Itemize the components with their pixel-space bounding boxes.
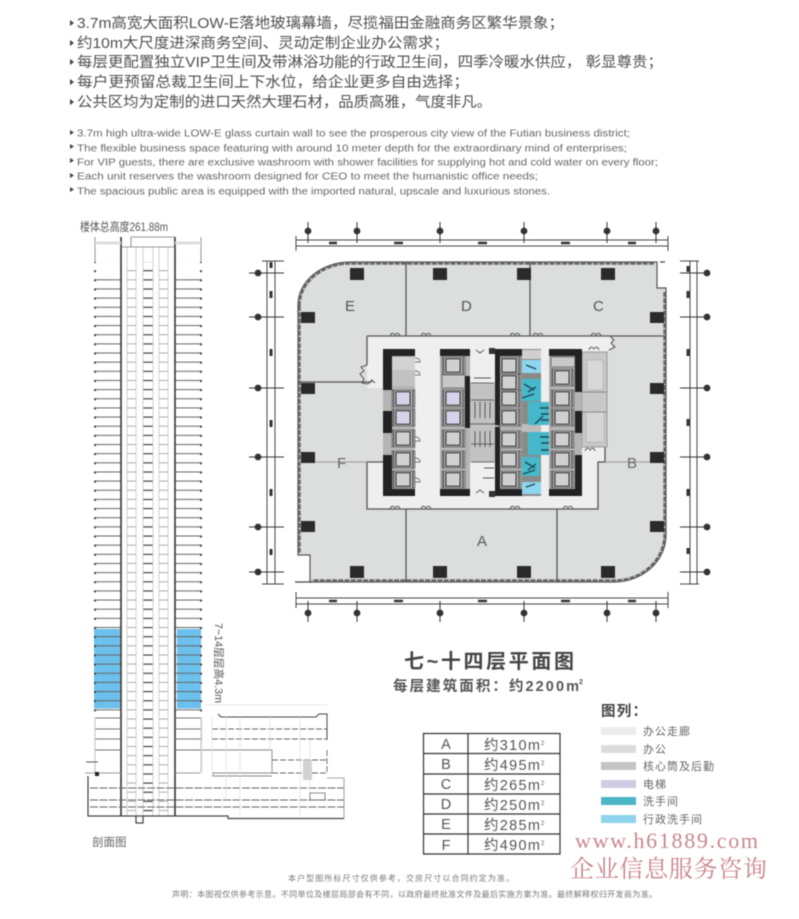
text block: Chinese features: 公共区均为定制的进口天然大理石材，品质高雅，气度非凡。 [77, 94, 492, 111]
unit labels: E [345, 298, 355, 315]
table: unit areas: F [442, 838, 451, 854]
table: unit areas: 2 [541, 841, 545, 847]
table: unit areas: 约310m [484, 737, 540, 754]
table: unit areas: 约490m [484, 837, 540, 854]
table: unit areas: 约250m [484, 797, 540, 814]
executive washroom top [522, 360, 541, 373]
table: unit areas: C [441, 777, 451, 793]
corridor [367, 336, 612, 509]
unit labels: B [627, 455, 637, 472]
washroom lower [522, 457, 540, 476]
text block: Chinese features: 3.7m高宽大面积LOW-E落地玻璃幕墙，尽揽福田金融商务区繁华景象； [77, 15, 564, 32]
table: unit areas: 约495m [484, 757, 540, 774]
unit labels: C [593, 298, 604, 315]
partition walls [298, 262, 666, 582]
footnote [172, 873, 657, 899]
elevator block 1 [383, 349, 420, 496]
label: floor height: 7~14层层高4.3m [212, 623, 226, 703]
text block: English features: Each unit reserves the washroom designed for CEO to meet the humanistic office needs; [77, 172, 538, 182]
washroom centre lower [528, 432, 552, 455]
axis bubbles left [249, 270, 284, 575]
legend: 核心筒及后勤 [643, 759, 715, 773]
watermark: 企业信息服务咨询 [570, 849, 767, 884]
table: unit areas: 约265m [484, 777, 540, 794]
chart: floor plan [249, 222, 710, 622]
footnote: 本户型图所标尺寸仅供参考，交房尺寸以合同约定为准。 [288, 873, 514, 883]
text block: Chinese features [70, 15, 663, 111]
legend [601, 703, 715, 826]
table: unit areas: D [441, 797, 451, 813]
footnote: 声明：本图视仅供参考示意。不同单位及楼层局部会有不同，以政府最终批准文件及最后实施方案为准。最终解释权归开发商为准。 [172, 889, 657, 899]
axis bubbles right [680, 270, 710, 575]
ground and basement [85, 772, 200, 774]
doors [360, 333, 615, 509]
axis bubbles top [305, 222, 659, 243]
legend: 洗手间 [643, 794, 679, 808]
table: unit areas: E [441, 817, 451, 833]
elevator block 4 [549, 349, 582, 496]
table: unit areas: 2 [541, 761, 545, 767]
text block: English features: 3.7m high ultra-wide LOW-E glass curtain wall to see the prosperous city view of the Futian business district; [77, 128, 630, 140]
table: unit areas: 约285m [484, 817, 540, 834]
unit labels [337, 298, 637, 550]
text block: Chinese features: 约10m大尺度进深商务空间、灵动定制企业办公需求； [77, 34, 449, 52]
text block: English features: The flexible business space featuring with around 10 meter depth for the extraordinary mind of enterprises; [77, 144, 627, 154]
unit labels: F [337, 455, 346, 472]
table: unit areas: 2 [541, 801, 545, 807]
label: section: 剖面图 [92, 835, 126, 849]
text block: English features [70, 128, 658, 198]
legend: 办公走廊 [643, 724, 691, 738]
table: unit areas: A [441, 737, 451, 753]
heading: building height: 楼体总高度261.88m [80, 219, 168, 234]
stairs [470, 348, 495, 497]
text block: English features: The spacious public area is equipped with the imported natural, upscale and luxurious stones. [77, 186, 550, 198]
washrooms [522, 349, 552, 496]
unit labels: A [477, 533, 487, 550]
elevator block 2 [440, 349, 470, 496]
text block: Chinese features: 每户更预留总裁卫生间上下水位，给企业更多自由选择； [77, 73, 469, 91]
title: floor plan: 七~十四层平面图 [404, 650, 574, 673]
axis bubbles bottom [305, 601, 659, 622]
watermark [570, 828, 767, 884]
legend: 图列： [601, 703, 647, 720]
legend: 办公 [643, 743, 667, 756]
table: unit areas [424, 734, 560, 854]
unit labels: D [461, 298, 472, 315]
chart: building section [85, 237, 344, 823]
text block: Chinese features: 每层更配置独立VIP卫生间及带淋浴功能的行政卫生间，四季冷暖水供应， 彰显尊贵； [77, 53, 663, 71]
washroom centre upper [528, 402, 552, 425]
columns [301, 268, 664, 578]
highlighted floors 7-14 left [94, 629, 120, 708]
floor lines right wing [175, 262, 201, 718]
subtitle: floor area: 2 [579, 679, 583, 686]
curtain wall [299, 264, 665, 580]
table: unit areas: 2 [541, 741, 545, 747]
table: unit areas: 2 [541, 821, 545, 827]
washroom upper [522, 379, 541, 401]
legend: 电梯 [643, 778, 667, 791]
text block: English features: For VIP guests, there are exclusive washroom with shower facilities for supplying hot and cold water on every floor; [77, 158, 658, 168]
table: unit areas: 2 [541, 781, 545, 787]
elevator block 3 [495, 349, 523, 496]
floor outline [298, 262, 666, 582]
podium [218, 714, 327, 740]
subtitle: floor area: 每层建筑面积：约2200m [393, 677, 579, 695]
watermark: www.h61889.com [575, 828, 758, 853]
legend: 行政洗手间 [643, 812, 703, 826]
floor lines left wing [95, 262, 121, 718]
highlighted floors 7-14 right [177, 629, 201, 708]
right service core [582, 352, 607, 447]
executive washroom bottom [522, 482, 541, 494]
table: unit areas: B [441, 757, 451, 773]
dimension lines [262, 236, 699, 608]
